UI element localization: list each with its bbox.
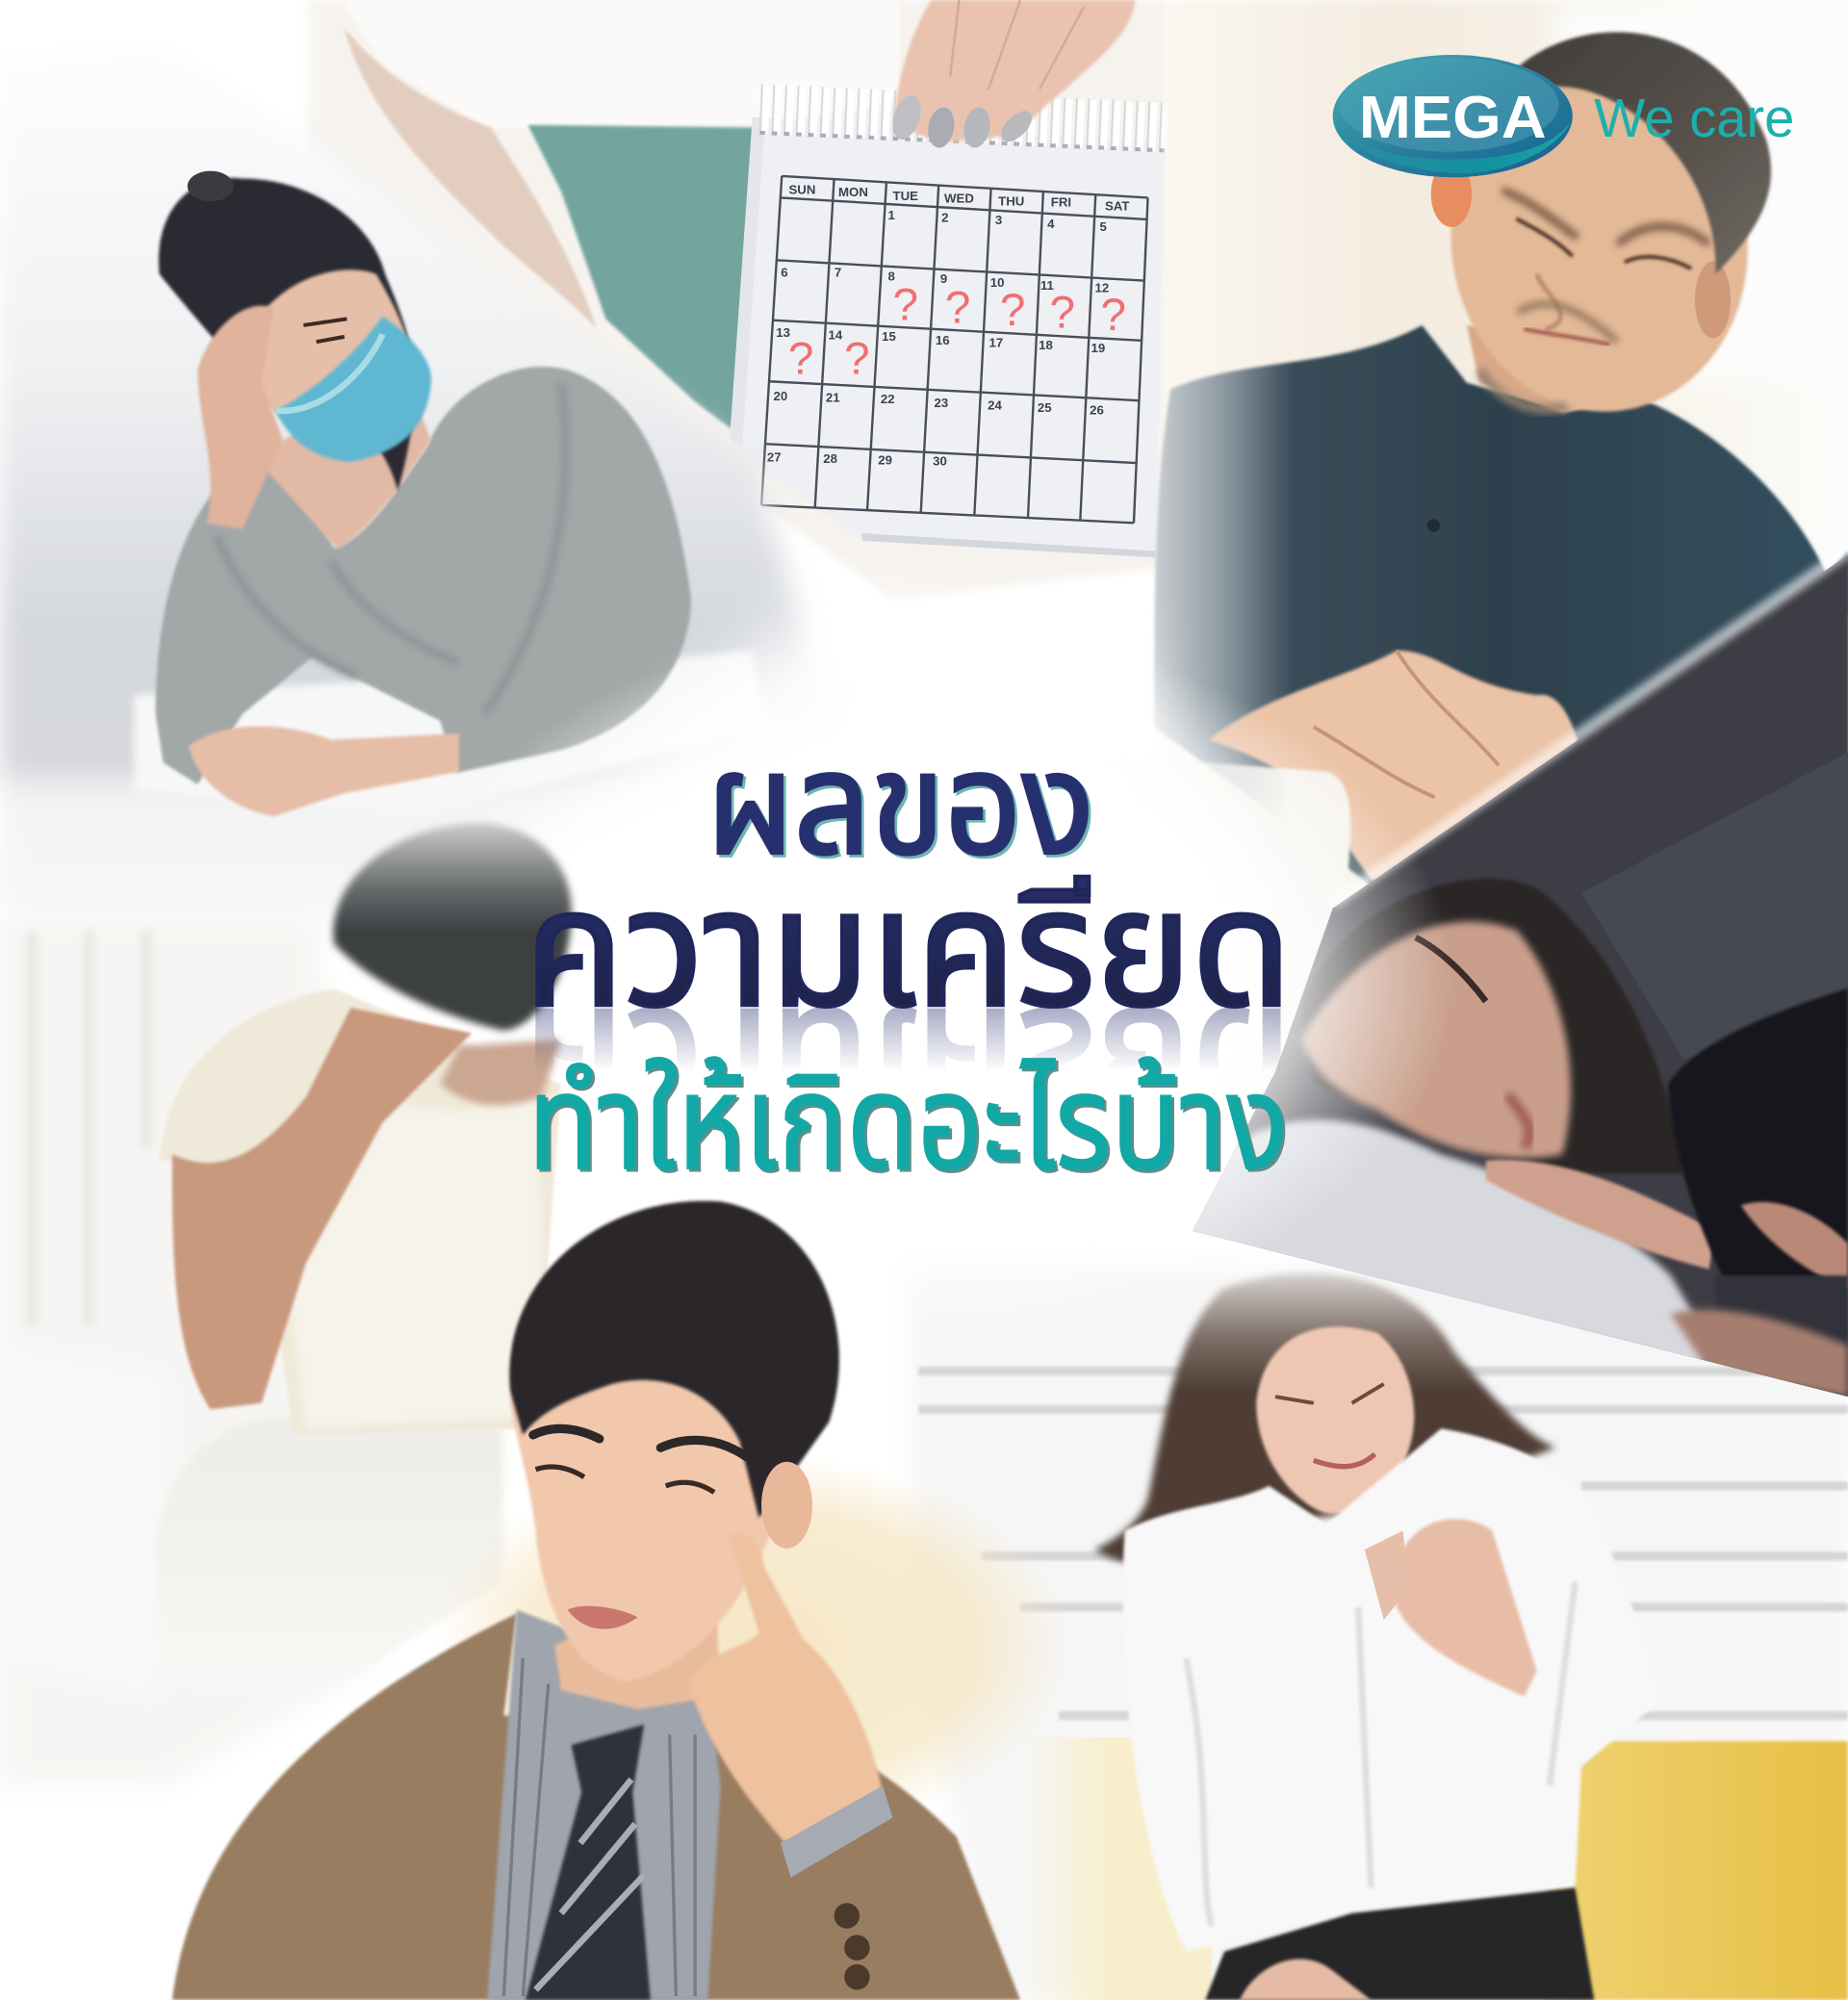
calendar: ?: [1000, 285, 1025, 336]
calendar: TUE: [893, 189, 918, 203]
calendar: FRI: [1051, 195, 1071, 210]
calendar: 26: [1090, 403, 1104, 418]
trousers: [156, 1418, 503, 1703]
calendar: 22: [881, 392, 895, 406]
calendar: 6: [781, 266, 788, 280]
photo: man clutching chest: [1154, 0, 1848, 918]
calendar: 10: [990, 275, 1005, 290]
photo: man with finger on temple: [172, 1201, 1071, 2000]
calendar: WED: [944, 192, 974, 206]
calendar: 12: [1094, 280, 1109, 295]
calendar: 8: [888, 269, 895, 284]
calendar: ?: [844, 333, 870, 384]
calendar: 11: [1040, 278, 1054, 293]
logo: [1333, 55, 1794, 177]
calendar: 29: [878, 452, 892, 467]
arm: [172, 1008, 472, 1409]
hand resting: [189, 726, 459, 816]
calendar: SAT: [1105, 199, 1130, 214]
calendar: 18: [1039, 338, 1053, 352]
calendar: ?: [1101, 290, 1126, 341]
title line 3: ทำให้เกิดอะไรบ้าง: [528, 1049, 1288, 1197]
calendar: 5: [1099, 219, 1107, 234]
calendar: 13: [776, 325, 790, 340]
calendar: ?: [788, 333, 813, 384]
calendar: [730, 110, 1168, 558]
head: [159, 178, 415, 491]
photo: woman clutching chest: [906, 1263, 1848, 2000]
calendar: 20: [774, 389, 787, 403]
title line 1: ผลของ: [709, 728, 1097, 886]
sweater: [156, 367, 691, 784]
photo: woman with mask: [0, 0, 829, 918]
title line 1: ผลของ: [706, 726, 1094, 885]
calendar: 25: [1038, 400, 1052, 415]
calendar: 15: [882, 329, 896, 344]
calendar: 19: [1091, 341, 1105, 355]
logo tagline: We care: [1594, 88, 1794, 149]
title: [535, 772, 1286, 1173]
calendar: SUN: [788, 182, 815, 196]
laptop edge behind title: [1071, 753, 1350, 1084]
calendar: 3: [995, 213, 1002, 227]
calendar: 21: [826, 390, 840, 404]
calendar: 27: [767, 450, 782, 465]
calendar: 4: [1047, 217, 1055, 231]
calendar: ?: [893, 280, 918, 331]
logo badge: [1333, 55, 1573, 177]
title line 2 reflection: ความเครียด: [525, 976, 1292, 1159]
photo: woman with phone in bed: [1186, 549, 1848, 1403]
title line 3: ทำให้เกิดอะไรบ้าง: [530, 1052, 1291, 1200]
title line 2: ความเครียด: [525, 857, 1292, 1039]
calendar: 16: [936, 333, 950, 347]
calendar: 9: [940, 271, 947, 286]
calendar: 7: [834, 266, 841, 280]
photo: woman with calendar: [306, 0, 1168, 600]
calendar: 24: [988, 397, 1003, 412]
calendar: ?: [1050, 288, 1075, 339]
calendar: THU: [998, 193, 1024, 208]
logo badge: MEGA: [1359, 85, 1547, 151]
arm to head: [197, 306, 283, 529]
calendar: 1: [888, 208, 895, 222]
fingers holding calendar: [887, 0, 1135, 150]
t-shirt: [160, 988, 561, 1435]
calendar: 2: [941, 211, 949, 225]
calendar: ?: [945, 282, 970, 333]
calendar: 14: [829, 328, 843, 343]
calendar: 30: [933, 454, 947, 469]
calendar: 28: [823, 451, 837, 466]
calendar: 17: [988, 335, 1003, 349]
calendar: MON: [838, 185, 868, 199]
calendar: 23: [935, 396, 948, 410]
photo: man with head in hands: [0, 823, 572, 1785]
